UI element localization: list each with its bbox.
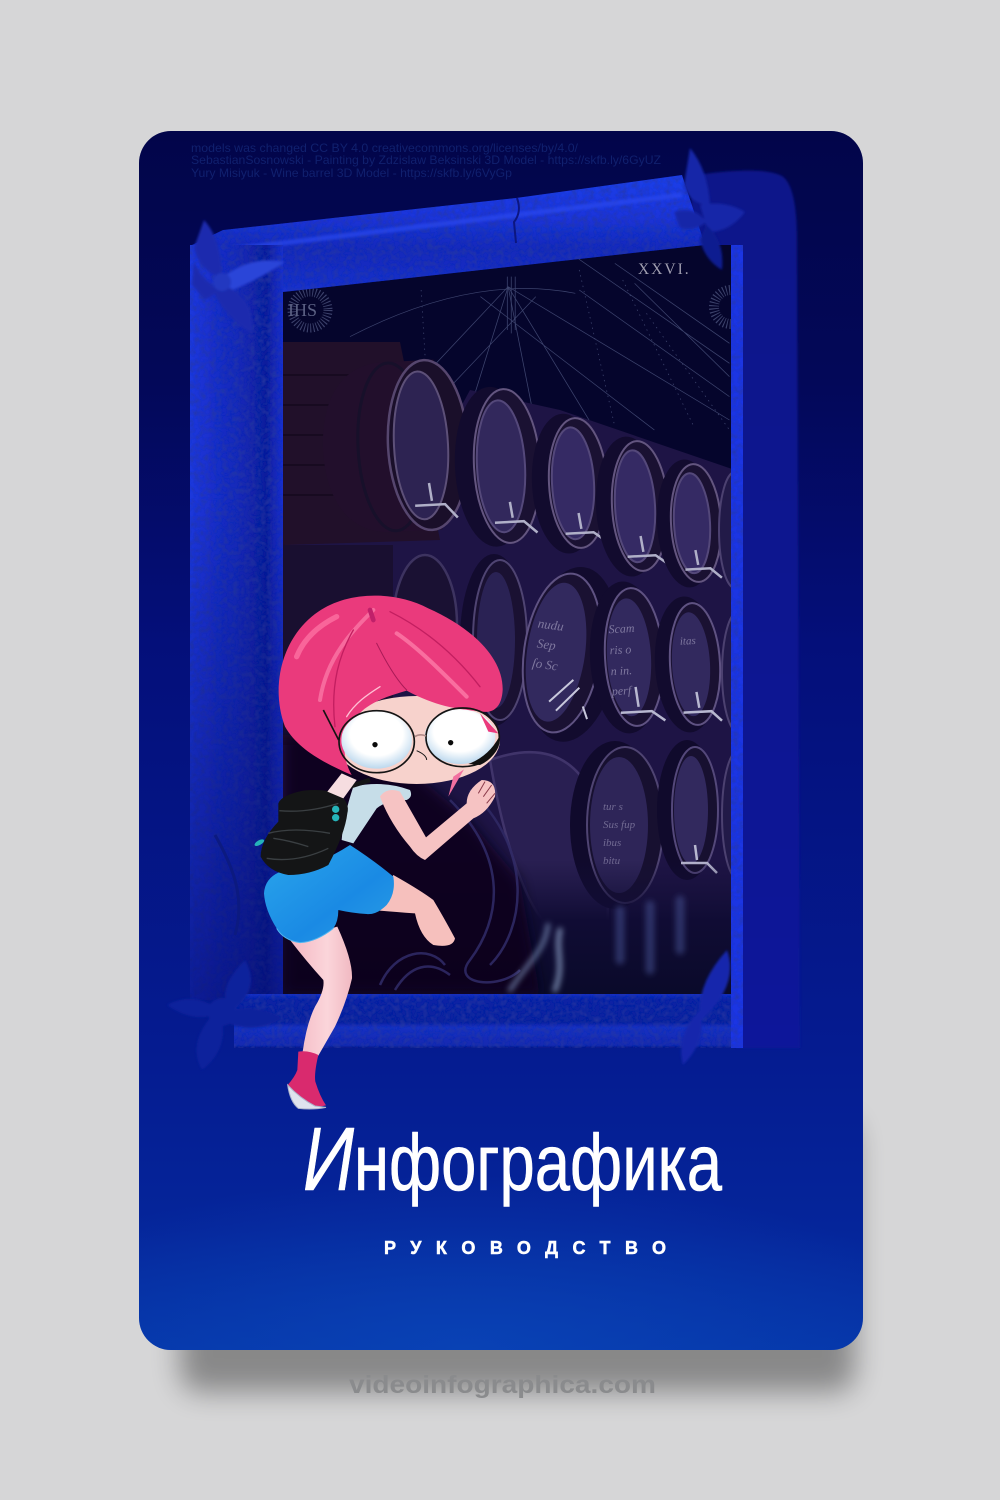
tank top: [342, 784, 411, 843]
barrels: bottom row, melting: [489, 740, 731, 907]
right eye white: [425, 709, 495, 764]
painting dark backdrop: [283, 245, 731, 469]
sun emblem IHS: IHS: [288, 300, 317, 320]
attribution caption: Yury Misiyuk - Wine barrel 3D Model - https://skfb.ly/6VyGp: [191, 166, 512, 180]
shorts: [264, 845, 394, 943]
barrel 1: [323, 358, 464, 532]
attribution caption: [191, 141, 661, 180]
eye whites: [341, 711, 412, 769]
barrel 11: itas: [680, 635, 696, 648]
card drop shadow: [180, 1120, 855, 1392]
raised leg: [373, 875, 455, 946]
painting inside the frame: [283, 240, 754, 1000]
frame left bar: [190, 245, 283, 1000]
barrel 10: n in.: [610, 663, 632, 678]
barrel 10: Scam: [608, 621, 635, 636]
barrel 9: Sep: [536, 636, 557, 653]
barrel 11: [651, 595, 724, 734]
barrel 3: [532, 414, 604, 554]
melted barrel 13: [489, 750, 582, 907]
attribution caption: models was changed CC BY 4.0 creativecommons.org/licenses/by/4.0/: [191, 141, 579, 155]
barrel 9: [522, 567, 608, 742]
frame left bar shading: [190, 500, 283, 1000]
barrel 6: [718, 472, 731, 588]
dark area behind the girl: [283, 735, 540, 994]
shoe: [288, 1051, 326, 1109]
barrel 14: tur s: [603, 801, 623, 813]
footer website: videoinfographica.com: [349, 1371, 656, 1399]
hair: [279, 596, 503, 775]
barrel 9: ſo Sc: [531, 655, 559, 673]
hair lock by cheek: [448, 769, 464, 797]
frame top bar: [190, 175, 705, 300]
backpack: [254, 780, 370, 875]
sun emblem right: [709, 285, 731, 329]
standing leg: [290, 927, 352, 1057]
subtitle: РУКОВОДСТВО: [384, 1238, 666, 1258]
barrel 7: [394, 554, 458, 624]
barrel 10: ris o: [609, 642, 632, 657]
barrel 14: [570, 741, 663, 909]
barrel 14: bitu: [603, 855, 621, 867]
shorts cuff: [277, 928, 333, 943]
hair highlights: [297, 610, 480, 727]
stray hair over glasses: [480, 713, 498, 733]
swirl strokes: [380, 790, 520, 990]
attribution caption: SebastianSosnowski - Painting by Zdzislaw Beksinski 3D Model - https://skfb.ly/6GyUZ: [191, 153, 661, 167]
finger lines: [478, 782, 495, 803]
barrel 12: [721, 616, 731, 728]
ornament: bottom left corner: [167, 960, 282, 1070]
barrel 16: [721, 756, 731, 874]
barrels: top row: [319, 358, 751, 589]
barrel 8: [460, 554, 528, 726]
barrel 15: [657, 740, 718, 880]
barrel 14: Sus fup: [603, 819, 636, 831]
barrel 4: [596, 436, 666, 576]
lower left dark wall: [283, 545, 393, 745]
barrel 14: ibus: [603, 837, 621, 849]
left vine decoration: [215, 835, 239, 935]
card panel: [139, 131, 863, 1350]
ornament: bottom right corner: [681, 950, 730, 1065]
girl character: [254, 596, 503, 1109]
ornament: top right corner: [674, 148, 745, 270]
barrel 5: [654, 458, 724, 589]
swirling floor: [283, 860, 733, 995]
frame bottom bar: [234, 994, 736, 1048]
plate number: XXVI.: [638, 261, 691, 278]
dark lens shadow: [468, 737, 499, 765]
barrel wall backdrop: [283, 390, 731, 901]
frame right bar: [731, 245, 743, 1048]
barrel 9: nudu: [537, 615, 565, 634]
frame top bar highlight band: [225, 195, 682, 250]
astronomical line drawing: [350, 257, 729, 430]
ear: [312, 699, 322, 718]
title: Инфографика: [303, 1110, 722, 1210]
brick plank lines: [283, 374, 348, 496]
brick wall left: [283, 342, 440, 545]
frame centre joint: [514, 198, 519, 243]
barrels: middle row: [393, 554, 754, 748]
pupils: [372, 740, 453, 747]
window frame side panel: [690, 170, 800, 1048]
barrel 2: [455, 387, 538, 546]
barrel 10: perf: [610, 683, 633, 698]
arm and hand: [380, 780, 495, 860]
ornament: top left corner: [192, 220, 285, 333]
glasses: [323, 708, 499, 773]
barrel 10: [586, 580, 667, 735]
water reflection glints: [510, 900, 680, 990]
collar: [327, 773, 357, 798]
face: [333, 696, 500, 784]
card bottom glow: [139, 1232, 705, 1350]
sun emblem IHS: [288, 292, 328, 328]
